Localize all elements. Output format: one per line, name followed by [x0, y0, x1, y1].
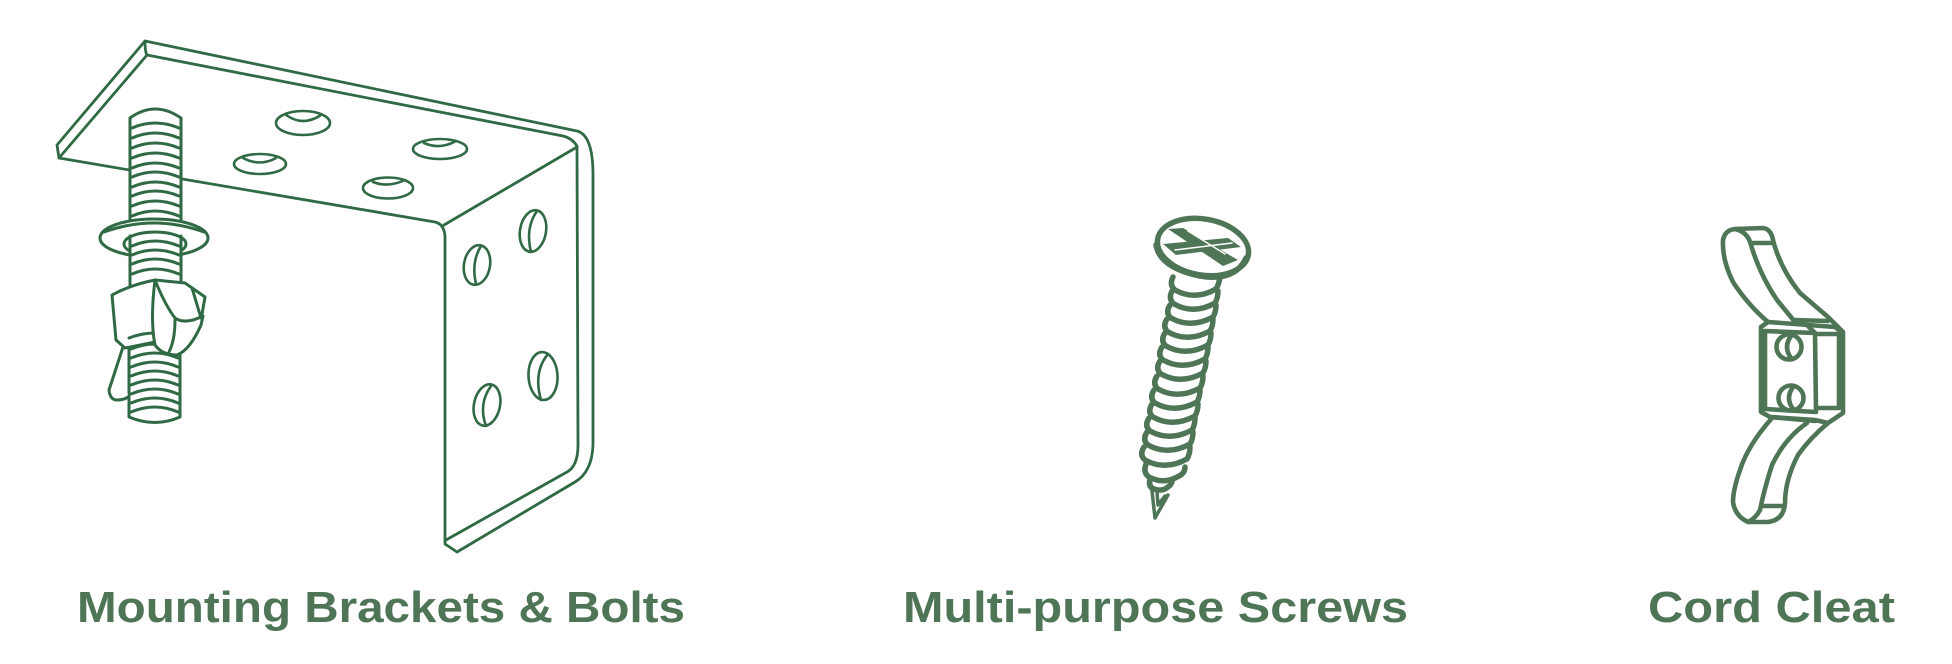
side face holes: [461, 208, 559, 428]
icon: mounting bracket and bolt: [57, 41, 593, 552]
wing nut: [109, 280, 205, 400]
screw threads: [1142, 277, 1220, 490]
screw tip: [1152, 491, 1168, 518]
cross slot: [1163, 228, 1241, 266]
icon: screw: [1142, 211, 1253, 518]
icon: cord cleat: [1723, 228, 1843, 522]
lower horn: [1733, 418, 1828, 522]
threaded bolt: [129, 109, 181, 422]
cleat body: [1761, 322, 1843, 423]
washer: [100, 219, 208, 286]
label: Mounting Brackets & Bolts: Mounting Brackets & Bolts: [77, 583, 685, 632]
label: Multi-purpose Screws: Multi-purpose Screws: [903, 583, 1408, 632]
upper horn: [1723, 228, 1843, 332]
screw holes: [1776, 334, 1804, 410]
bracket outline: [57, 41, 593, 552]
label: Cord Cleat: Cord Cleat: [1648, 583, 1895, 632]
screw head: [1153, 211, 1253, 283]
top face holes: [234, 111, 467, 198]
